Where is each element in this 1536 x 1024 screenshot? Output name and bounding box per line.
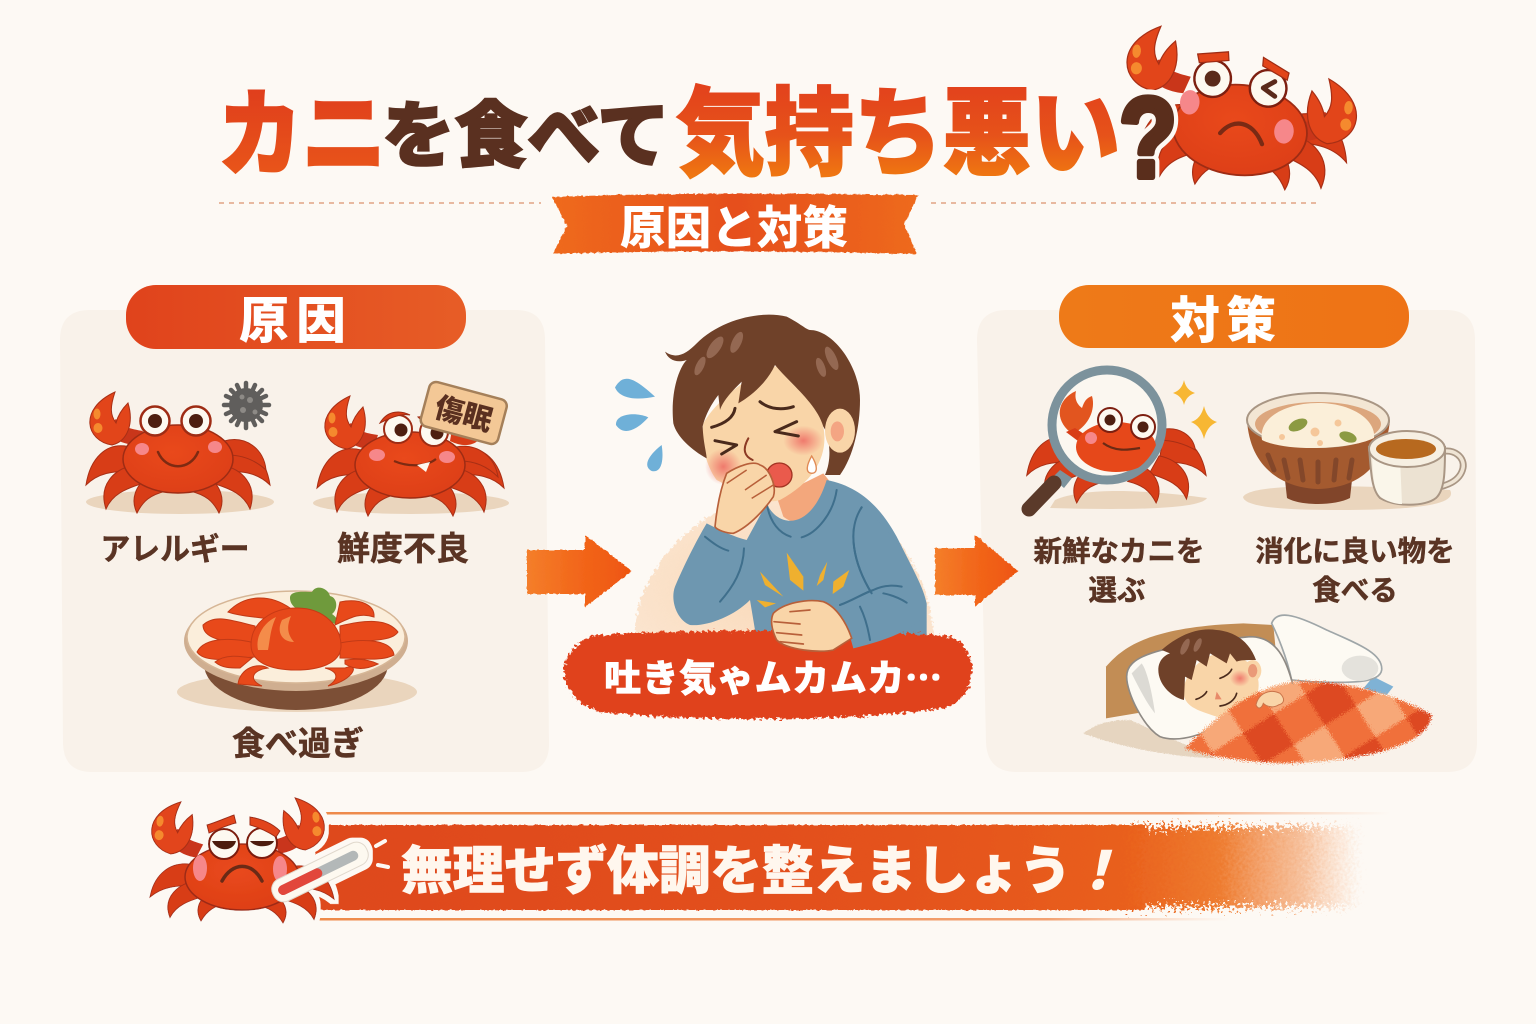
bowl rim	[1247, 393, 1389, 447]
subtitle ribbon	[219, 194, 1317, 254]
cup handle	[1435, 451, 1463, 488]
question mark outline: ?	[1119, 75, 1177, 202]
causes panel background	[60, 310, 549, 772]
blush left	[705, 448, 742, 485]
bottom decorative line	[316, 918, 1230, 920]
spoiled sign: 傷眠	[431, 391, 496, 438]
icon: porridge and tea	[1243, 393, 1463, 607]
illustration: nauseous boy	[615, 315, 927, 640]
garnish leaf	[290, 588, 338, 624]
nose	[745, 438, 753, 460]
icon: crab on plate	[177, 588, 417, 762]
icon: magnifier inspecting crab	[1027, 370, 1217, 607]
crab body group	[1117, 24, 1363, 197]
hair	[1158, 629, 1256, 700]
bowl ribs	[1268, 455, 1352, 482]
question mark: ?	[1119, 75, 1177, 202]
cup body	[1369, 447, 1445, 505]
eaten-too-much label: 食べ過ぎ	[232, 725, 364, 762]
right arm	[840, 507, 927, 648]
causes heading pill	[126, 285, 466, 349]
dashed line right	[931, 202, 1317, 204]
cup handle inner	[1435, 451, 1463, 488]
grumpy crab	[317, 396, 504, 516]
illustration: sleeping boy in bed	[1083, 615, 1432, 763]
face	[702, 366, 824, 501]
blush cheeks	[783, 426, 823, 456]
label: choose fresh crab: 新鮮なカニを	[1033, 536, 1205, 568]
magnifier handle	[1052, 470, 1072, 488]
stomach pain burst	[757, 553, 849, 607]
title part: カニ: カニ	[218, 82, 386, 187]
plate shadow	[177, 672, 417, 712]
sleeping face	[1183, 653, 1259, 718]
freshness label: 鮮度不良	[337, 530, 469, 567]
banner message text: 無理せず体調を整えましょう！	[401, 843, 1123, 901]
hair shine	[1178, 637, 1203, 656]
sparkle large	[1191, 406, 1217, 439]
ribbon shape	[552, 194, 918, 254]
banner main fill	[315, 825, 1145, 910]
bowl foot	[1285, 480, 1352, 504]
allergy label: アレルギー	[100, 532, 250, 567]
ear inner	[1248, 664, 1257, 677]
icon: worried crab with question mark	[1117, 24, 1363, 202]
porridge toppings	[1279, 416, 1358, 446]
label: digestible food	[1255, 536, 1455, 607]
blanket	[1185, 682, 1432, 763]
crab legs on plate	[197, 598, 398, 686]
outer crab legs	[1027, 429, 1206, 503]
nose	[1215, 692, 1222, 699]
blue pajama edge	[1363, 677, 1393, 695]
ground shadow	[1083, 720, 1217, 758]
sleeve folds	[840, 507, 907, 640]
ear inner	[831, 421, 844, 441]
ground shadow	[86, 490, 274, 514]
bowl inside	[1255, 402, 1381, 446]
label: digestible food: 消化に良い物を	[1255, 536, 1455, 568]
spoiled sign	[419, 380, 508, 446]
lower fingers	[774, 610, 810, 644]
hand covering mouth	[715, 463, 774, 533]
pillow shade	[1342, 656, 1378, 681]
footer message banner	[315, 812, 1390, 920]
blush	[1230, 670, 1250, 687]
thermometer	[268, 838, 372, 906]
label: choose fresh crab: 選ぶ	[1088, 575, 1146, 607]
banner shape	[564, 631, 972, 719]
porridge	[1262, 403, 1374, 448]
crab inside lens	[1060, 391, 1156, 472]
bowl body	[1247, 420, 1390, 489]
icon: allergy crab	[86, 383, 274, 567]
pillow fold	[1132, 663, 1155, 713]
causes heading text: 原因	[239, 293, 346, 349]
crab shell	[251, 608, 341, 670]
label: choose fresh crab	[1033, 536, 1205, 607]
panel: causes	[60, 285, 549, 772]
shadow	[1243, 486, 1451, 510]
ground shadow	[313, 492, 509, 514]
banner grainy fade	[1125, 827, 1360, 907]
title part: 気持ち悪い: 気持ち悪い	[676, 81, 1120, 188]
dashed line left	[219, 202, 541, 204]
lower hand	[772, 601, 852, 651]
icon: sick crab with thermometer	[149, 794, 372, 923]
cup rim	[1369, 431, 1445, 467]
panel: remedies	[977, 285, 1477, 772]
head pillow	[1127, 637, 1293, 739]
banner text: 吐き気ゃムカムカ…	[604, 648, 942, 702]
ribbon text: 原因と対策	[620, 202, 848, 254]
finger lines	[727, 470, 773, 498]
hand on blanket	[1256, 691, 1284, 708]
upright pillow	[1272, 615, 1382, 682]
neck	[777, 473, 837, 523]
icon: virus germ	[224, 383, 269, 428]
plate rim	[184, 591, 408, 691]
title part: を食べて: を食べて	[382, 97, 670, 177]
remedies heading pill	[1059, 285, 1409, 348]
sweater folds	[705, 490, 907, 605]
remedies panel background	[977, 310, 1477, 772]
thermometer tick marks	[376, 841, 388, 867]
plate base	[204, 618, 388, 710]
tear	[807, 456, 816, 473]
shadow	[1050, 491, 1207, 509]
sparkle small	[1173, 380, 1195, 405]
headboard	[1106, 623, 1277, 718]
eyes and mouth	[1196, 669, 1237, 706]
shell highlights	[257, 616, 294, 650]
top decorative line	[322, 812, 1390, 814]
sweater	[673, 480, 927, 640]
label: digestible food: 食べる	[1312, 575, 1398, 607]
sweat drops	[615, 379, 662, 471]
facial features	[712, 402, 798, 454]
sick crab	[149, 794, 334, 923]
arrow: symptoms to remedies	[935, 535, 1018, 607]
illustration: boy's right arm and lower hand	[772, 507, 927, 651]
symptom banner	[564, 631, 972, 719]
plate top	[187, 591, 405, 683]
cup highlight	[1372, 455, 1402, 504]
remedies heading text: 対策	[1170, 293, 1276, 349]
hair	[665, 315, 860, 475]
tea	[1376, 439, 1436, 459]
smiling crab	[86, 392, 270, 513]
ear	[1244, 660, 1261, 681]
arrow: causes to symptoms	[527, 535, 632, 607]
ear	[825, 409, 855, 453]
open mouth	[767, 463, 792, 487]
title	[218, 81, 1120, 188]
hair shine	[692, 330, 841, 378]
icon: spoiled crab with sign	[313, 380, 509, 567]
lens	[1052, 370, 1162, 480]
handle grip	[1029, 483, 1054, 509]
background blob behind boy	[634, 492, 934, 652]
